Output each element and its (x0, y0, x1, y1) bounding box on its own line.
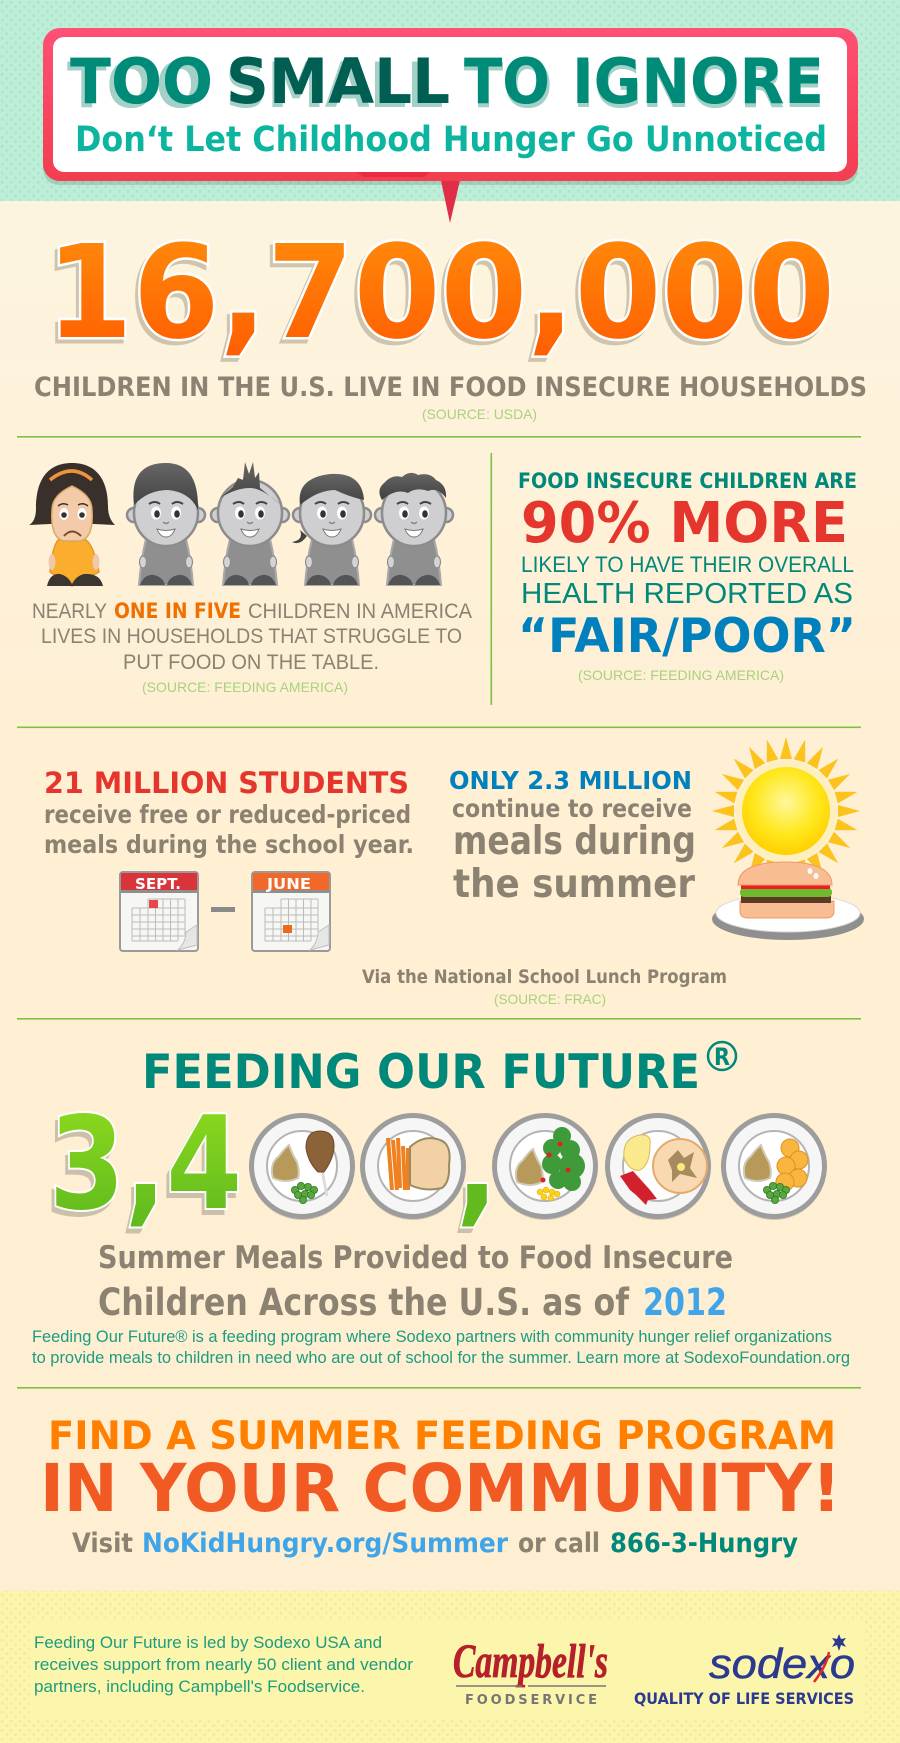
text: program description: to provide meals to children in need who are out of school for the summer. Learn more at SodexoFoundation.org (32, 1348, 850, 1367)
call to action: IN YOUR COMMUNITY! (40, 1450, 841, 1527)
comma: , (456, 1090, 498, 1239)
dash between calendars (211, 907, 235, 912)
plate: gravy, nuggets, peas (722, 1116, 826, 1220)
call to action: NoKidHungry.org/Summer (142, 1528, 509, 1559)
stat: fair / poor: “FAIR/POOR” (518, 609, 856, 664)
source: Feeding America left: (SOURCE: FEEDING AMERICA) (142, 679, 348, 695)
call to action: Visit (72, 1528, 133, 1559)
icon: September calendar (120, 872, 198, 951)
title: TOO SMALL TO IGNORE (67, 49, 824, 122)
icon: grey boy with curly hair (375, 473, 453, 585)
icon: June calendar (252, 872, 330, 951)
title: IGNORE (572, 45, 824, 118)
icon: sun (712, 737, 860, 884)
digits 3,4: 3,4 (49, 1090, 242, 1239)
text: 21 million students: receive free or reduced-priced (44, 800, 411, 829)
panel: 90% more: LIKELY TO HAVE THEIR OVERALL (521, 552, 854, 577)
speech bubble header (43, 28, 858, 223)
plate: pancake, potato, meat (606, 1116, 710, 1220)
icon: grey girl with ponytail (292, 474, 371, 585)
text: only 2.3 million: ONLY 2.3 MILLION (449, 766, 692, 795)
source: FRAC: (SOURCE: FRAC) (494, 991, 606, 1007)
comma: , (456, 1090, 498, 1239)
footer text: receives support from nearly 50 client and vendor (34, 1655, 413, 1674)
footer text (30, 1620, 865, 1720)
digits 3,4: 3,4 (46, 1095, 239, 1244)
plate: chicken, gravy, peas (250, 1116, 354, 1220)
big number: 16,700,000: 16,700,000 (43, 222, 832, 372)
logo: Sodexo (634, 1634, 855, 1708)
header band (0, 0, 900, 201)
icon: sad girl in colour (29, 463, 115, 586)
text: summer meals provided: 2012 (643, 1281, 727, 1324)
text: 21 million students: meals during the school year. (44, 830, 414, 859)
heading: Feeding Our Future: FEEDING OUR FUTURE (142, 1045, 700, 1100)
logo: Sodexo: QUALITY OF LIFE SERVICES (634, 1689, 854, 1708)
text: only 2.3 million: continue to receive (452, 794, 692, 823)
icon: grey boy two with spiked hair (211, 462, 289, 585)
panel: 90% more (518, 469, 857, 683)
text: 21 million students (44, 766, 414, 859)
icon: grey boy one (127, 463, 205, 585)
icon: September calendar: SEPT. (135, 875, 181, 893)
plate: gravy, salad, corn (493, 1116, 597, 1220)
text: 21 million students: 21 MILLION STUDENTS (44, 766, 409, 800)
logo: Sodexo: sodexo (709, 1640, 855, 1687)
icon: row of five children (29, 462, 453, 586)
logo: Campbell's Foodservice: Campbell's (453, 1635, 608, 1688)
call to action (40, 1414, 841, 1559)
text: one in five children: ONE IN FIVE (114, 599, 241, 623)
call to action: FIND A SUMMER FEEDING PROGRAM (48, 1414, 836, 1459)
panel: 90% more: HEALTH REPORTED AS (521, 578, 853, 610)
panel: 90% more: FOOD INSECURE CHILDREN ARE (518, 469, 857, 493)
text: only 2.3 million: meals during (453, 819, 696, 864)
plate: carrots and toast (361, 1116, 465, 1220)
text: one in five children: LIVES IN HOUSEHOLDS THAT STRUGGLE TO (41, 625, 462, 648)
footer text: Feeding Our Future is led by Sodexo USA and (34, 1633, 382, 1652)
big number: 16,700,000: 16,700,000 (46, 218, 835, 368)
footer text: partners, including Campbell's Foodservice. (34, 1677, 365, 1696)
text: only 2.3 million (449, 766, 696, 907)
text: summer meals provided: Children Across the U.S. as of (98, 1281, 630, 1324)
text: one in five children: NEARLY (32, 600, 107, 623)
comma: , (453, 1095, 495, 1244)
text: program description (32, 1327, 850, 1367)
logo: Campbell's Foodservice: FOODSERVICE (465, 1693, 597, 1708)
logo: Campbell's Foodservice (453, 1635, 608, 1708)
text: only 2.3 million: the summer (453, 862, 696, 907)
title: TOO (70, 45, 213, 118)
call to action: or call (518, 1528, 600, 1559)
text: one in five children (32, 599, 472, 674)
big number: 16,700,000: 16,700,000 (46, 218, 835, 368)
title: TO (464, 45, 550, 118)
source: USDA: (SOURCE: USDA) (422, 406, 537, 422)
text: summer meals provided: Summer Meals Provided to Food Insecure (98, 1240, 733, 1276)
big number: 3,400,000 with plates as zeros (46, 1090, 826, 1244)
text: program description: Feeding Our Future® is a feeding program where Sodexo partners with community hunger relief organizations (32, 1327, 832, 1346)
call to action: 866-3-Hungry (610, 1528, 798, 1559)
footer band (0, 1591, 900, 1743)
heading: Feeding Our Future: R (714, 1043, 730, 1071)
digits 3,4: 3,4 (49, 1090, 242, 1239)
title: SMALL (226, 45, 450, 118)
icon: June calendar: JUNE (266, 875, 311, 893)
source: Feeding America right: (SOURCE: FEEDING AMERICA) (578, 667, 784, 683)
text: summer meals provided (98, 1240, 733, 1324)
text: one in five children: CHILDREN IN AMERICA (248, 600, 472, 623)
icon: burger on plate (712, 862, 864, 940)
text: national school lunch program: Via the National School Lunch Program (362, 966, 727, 988)
stat: 90% more: 90% MORE (521, 491, 848, 556)
subtitle: Don‘t Let Childhood Hunger Go Unnoticed (75, 120, 827, 160)
text: one in five children: PUT FOOD ON THE TABLE. (123, 651, 379, 674)
